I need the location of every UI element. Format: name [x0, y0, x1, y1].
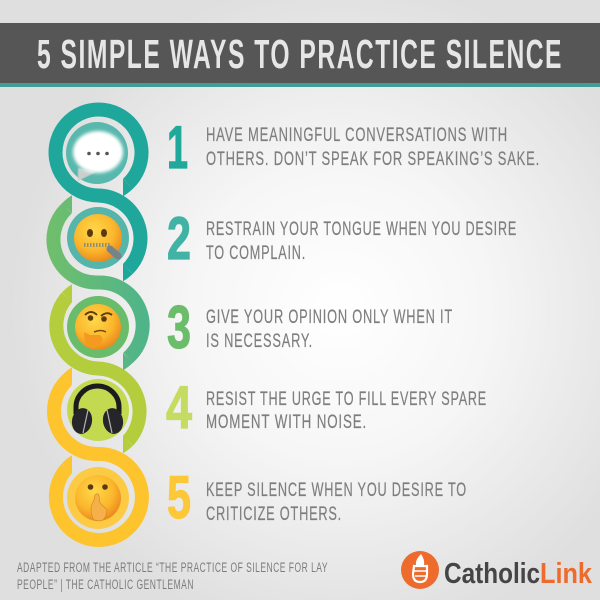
ribbon: interlocking rings: [53, 110, 143, 540]
item 5: 5: [167, 464, 191, 531]
item 2: [167, 205, 517, 272]
item 5: CRITICIZE OTHERS.: [206, 503, 342, 525]
item 5: [167, 464, 467, 531]
item 3: 3: [167, 294, 191, 361]
item 3: IS NECESSARY.: [206, 330, 313, 352]
source credit: [17, 560, 328, 592]
item 4: [166, 374, 487, 441]
ribbon segment: yellow: [54, 370, 142, 540]
title banner: [0, 23, 600, 87]
ribbon segment: lime: [56, 287, 140, 450]
item 2: 2: [167, 205, 191, 272]
logo: Catholic Link: [401, 551, 593, 590]
icon 2: zipper mouth face: [67, 207, 129, 269]
item 1: 1: [167, 114, 188, 181]
item 3: [167, 294, 453, 361]
icon 4: headphones: [67, 379, 129, 441]
source credit: PEOPLE” | THE CATHOLIC GENTLEMAN: [17, 577, 194, 592]
item 5: KEEP SILENCE WHEN YOU DESIRE TO: [206, 479, 467, 501]
item 4: MOMENT WITH NOISE.: [206, 411, 367, 433]
icon 5: shushing face: [67, 467, 129, 529]
item 4: 4: [166, 374, 192, 441]
logo: Catholic Link: Link: [540, 558, 593, 590]
item 1: [167, 114, 540, 181]
ribbon segment: green: [53, 198, 143, 367]
icon 1: speech bubble: [66, 122, 128, 184]
icon 3: thinking face: [67, 296, 129, 358]
ribbon segment: teal: [56, 110, 142, 278]
source credit: ADAPTED FROM THE ARTICLE “THE PRACTICE OF SILENCE FOR LAY: [17, 560, 328, 575]
item 2: TO COMPLAIN.: [206, 242, 306, 264]
logo: Catholic Link: Catholic: [444, 558, 540, 590]
item 3: GIVE YOUR OPINION ONLY WHEN IT: [206, 306, 453, 328]
